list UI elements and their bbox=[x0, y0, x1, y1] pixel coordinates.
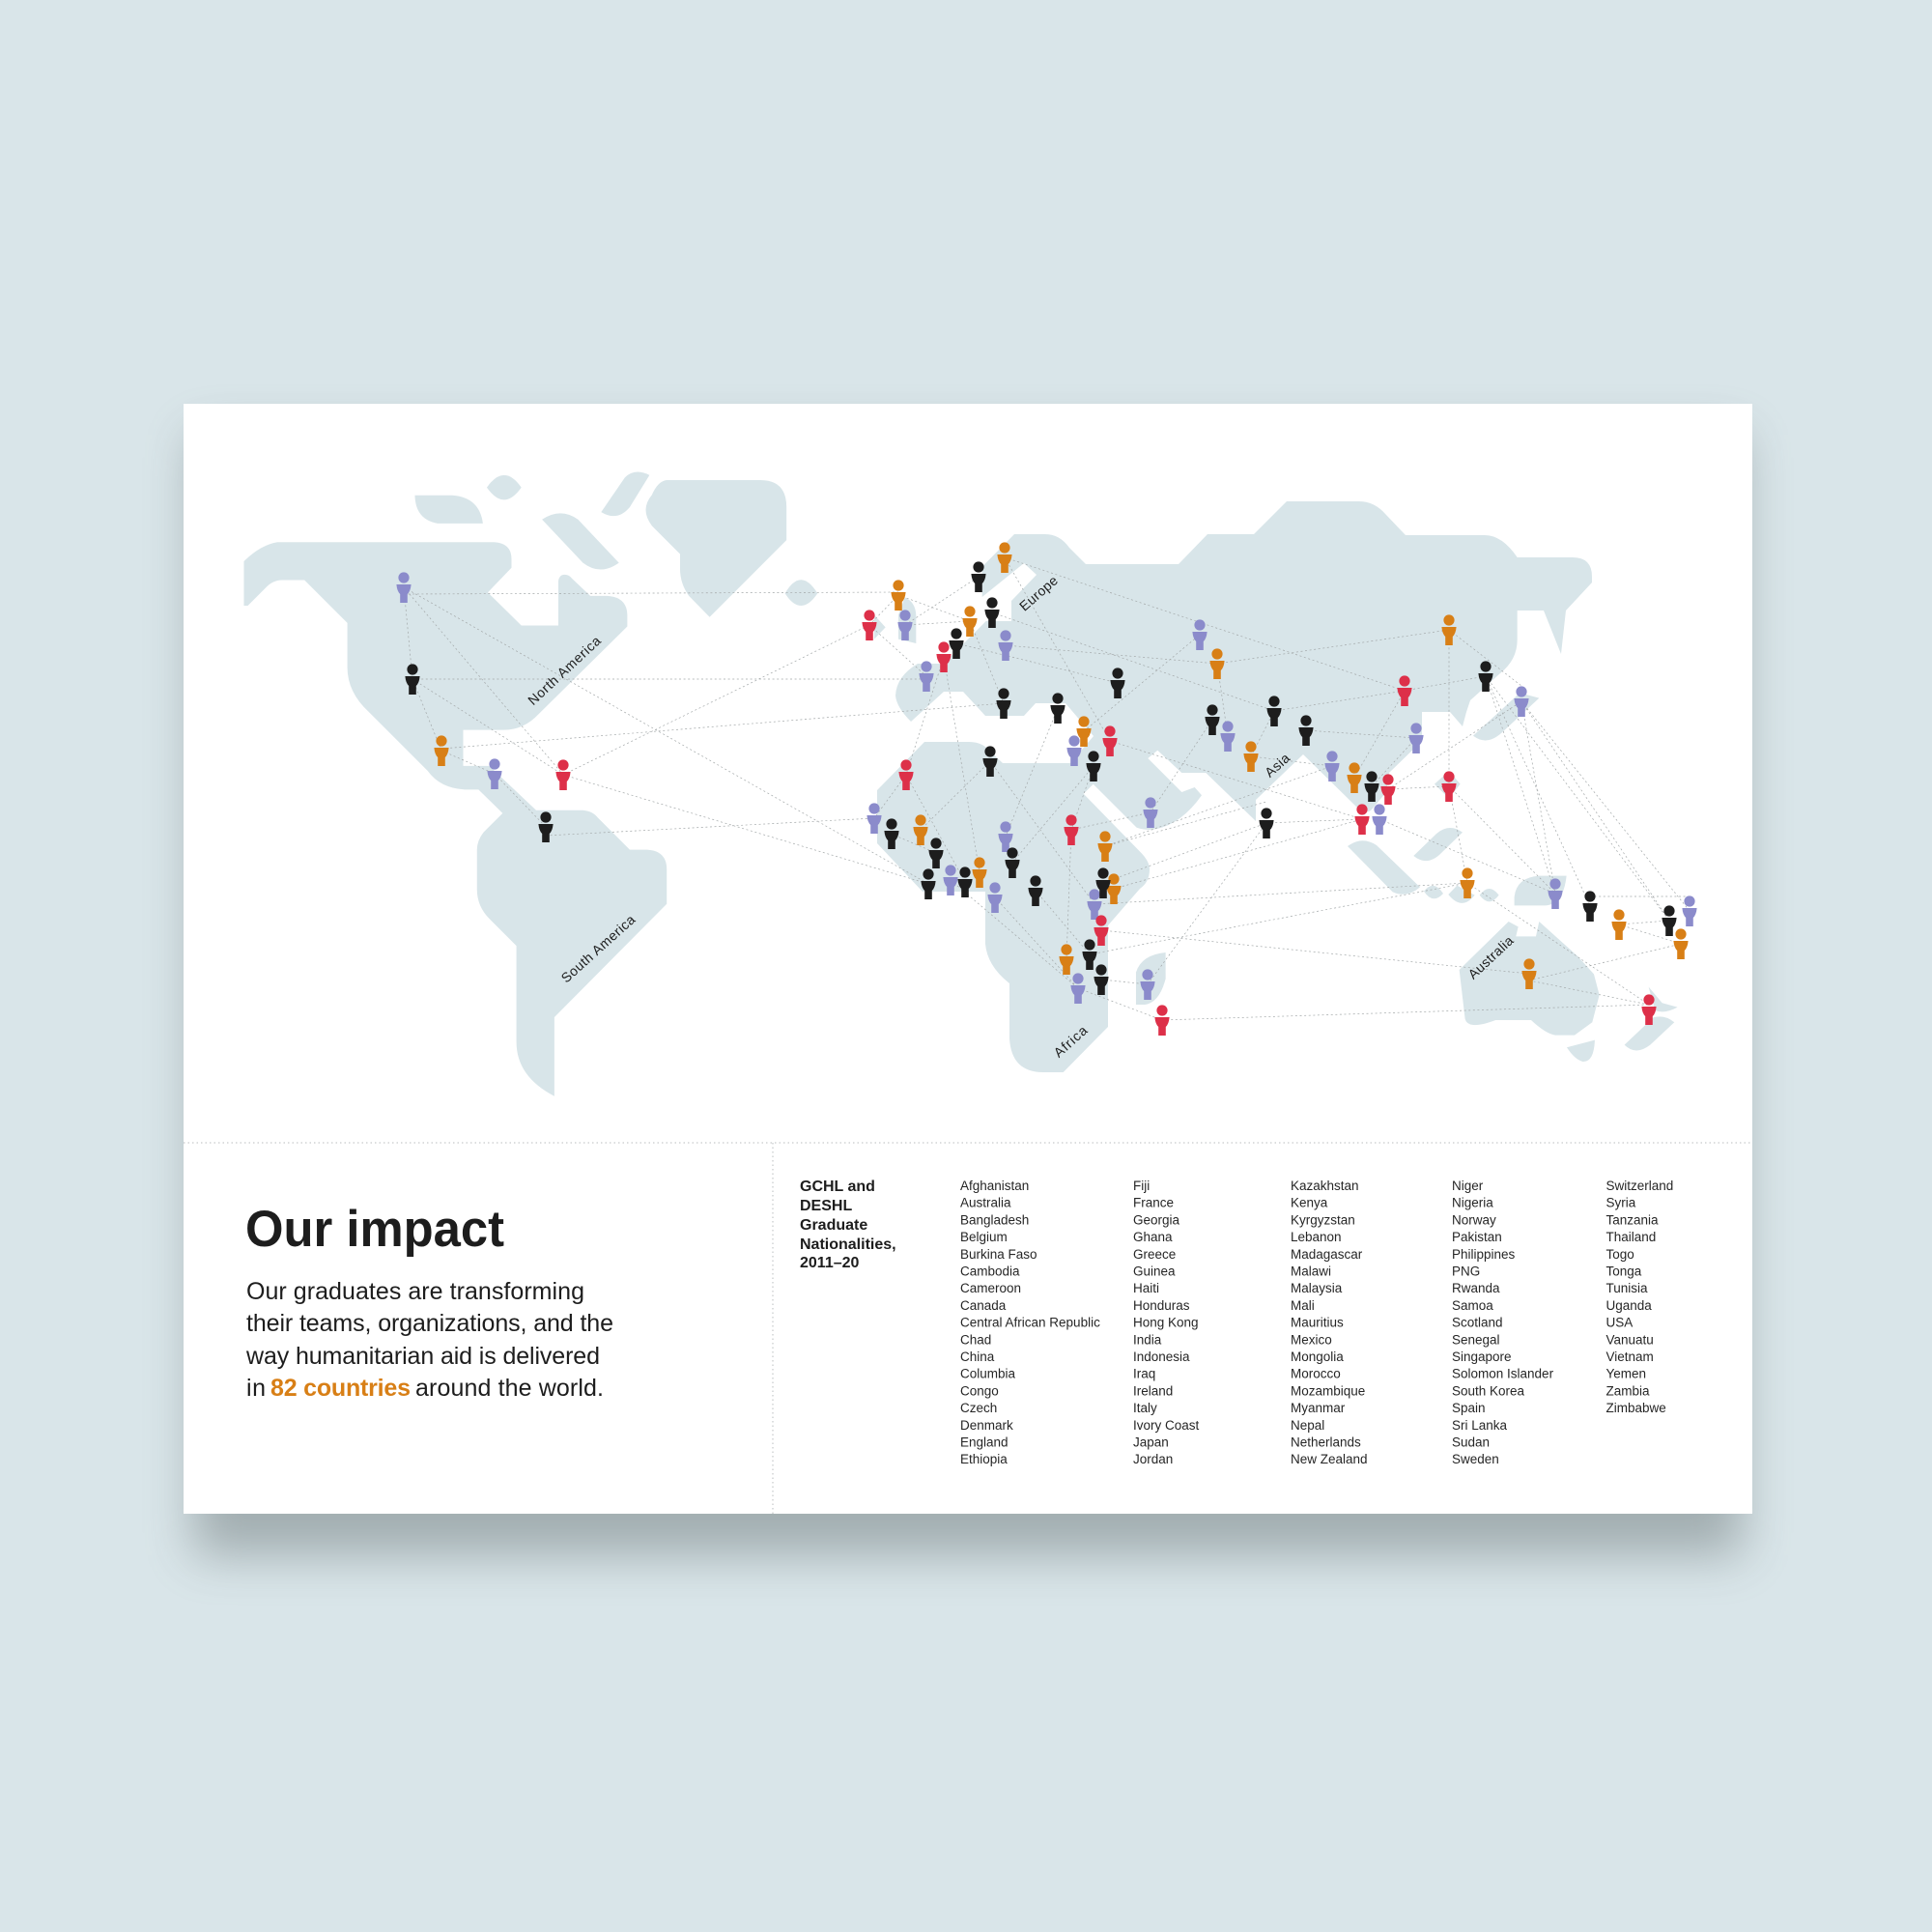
pin: purple bbox=[1087, 889, 1102, 920]
continent label: Asia: Asia bbox=[1262, 750, 1293, 781]
intro text block: Our graduates are transforming bbox=[246, 1278, 584, 1305]
pin: red bbox=[1397, 675, 1412, 706]
pin: black bbox=[1050, 693, 1065, 724]
pin: black bbox=[1082, 939, 1097, 970]
country list column 1: Burkina Faso bbox=[960, 1247, 1037, 1262]
country list column 2: Ghana bbox=[1133, 1230, 1173, 1244]
pin: black bbox=[1005, 847, 1020, 878]
country list column 2: Hong Kong bbox=[1133, 1316, 1199, 1330]
continent label: Australia: Australia bbox=[1464, 932, 1517, 982]
pin: purple bbox=[1324, 751, 1340, 781]
card shadow bbox=[193, 435, 1743, 1555]
country list column 3: Netherlands bbox=[1291, 1435, 1361, 1449]
list heading: GCHL and bbox=[800, 1179, 875, 1195]
country list column 5: Syria bbox=[1605, 1196, 1636, 1210]
country list column 5: Thailand bbox=[1605, 1230, 1656, 1244]
country list column 1: China bbox=[960, 1350, 995, 1364]
country list column 3: Malawi bbox=[1291, 1264, 1331, 1279]
pin: black bbox=[1205, 704, 1220, 735]
pin: purple bbox=[1192, 619, 1208, 650]
country list column 2: Ireland bbox=[1133, 1383, 1173, 1398]
country list column 4: Pakistan bbox=[1452, 1230, 1502, 1244]
pin: black bbox=[1095, 867, 1111, 898]
pin: orange bbox=[997, 542, 1012, 573]
country list column 1: Ethiopia bbox=[960, 1452, 1008, 1466]
country list column 4: Solomon Islander bbox=[1452, 1367, 1554, 1381]
list heading: Nationalities, bbox=[800, 1236, 896, 1253]
country list column 1: Afghanistan bbox=[960, 1179, 1029, 1193]
intro text block: in bbox=[246, 1375, 266, 1402]
country list column 5: Zimbabwe bbox=[1605, 1401, 1666, 1415]
country list column 4: Nigeria bbox=[1452, 1196, 1493, 1210]
country list column 5: Vietnam bbox=[1605, 1350, 1654, 1364]
country list column 3: New Zealand bbox=[1291, 1452, 1368, 1466]
pin: orange bbox=[434, 735, 449, 766]
pin: orange bbox=[1076, 716, 1092, 747]
country list column 5: Uganda bbox=[1605, 1298, 1652, 1313]
pin: orange bbox=[1059, 944, 1074, 975]
intro text block: way humanitarian aid is delivered bbox=[245, 1343, 600, 1370]
continent label: North America: North America bbox=[525, 633, 604, 708]
pin: black bbox=[1364, 771, 1379, 802]
country list column 2: France bbox=[1133, 1196, 1174, 1210]
pin: red bbox=[1094, 915, 1109, 946]
country list column 4: Philippines bbox=[1452, 1247, 1516, 1262]
pin: black bbox=[1298, 715, 1314, 746]
country list column 2: Ivory Coast bbox=[1133, 1418, 1200, 1433]
country list column 3: Kyrgyzstan bbox=[1291, 1212, 1355, 1227]
panel dividers bbox=[184, 1143, 1752, 1514]
world map bbox=[243, 472, 1697, 1096]
pin: purple bbox=[919, 661, 934, 692]
land: Americas and Arctic islands bbox=[243, 472, 817, 1096]
pin: purple bbox=[867, 803, 882, 834]
title: Our impact bbox=[245, 1201, 504, 1258]
intro text block: their teams, organizations, and the bbox=[246, 1310, 613, 1337]
country list column 3: Mongolia bbox=[1291, 1350, 1344, 1364]
country list column 3: Lebanon bbox=[1291, 1230, 1342, 1244]
country list column 3: Myanmar bbox=[1291, 1401, 1346, 1415]
country list column 4: Niger bbox=[1452, 1179, 1484, 1193]
list heading: Graduate bbox=[800, 1217, 867, 1234]
country list column 1: Australia bbox=[960, 1196, 1011, 1210]
pin: black bbox=[1478, 661, 1493, 692]
country list column 1: Bangladesh bbox=[960, 1212, 1029, 1227]
pin: red bbox=[898, 759, 914, 790]
country list column 2: Italy bbox=[1133, 1401, 1157, 1415]
pin: orange bbox=[913, 814, 928, 845]
pin: black bbox=[982, 746, 998, 777]
pin: black bbox=[928, 838, 944, 868]
pin: red bbox=[1441, 771, 1457, 802]
country list column 1: Columbia bbox=[960, 1367, 1016, 1381]
country list column 4: Samoa bbox=[1452, 1298, 1493, 1313]
country list column 4: Sudan bbox=[1452, 1435, 1490, 1449]
country list column 1: Chad bbox=[960, 1332, 991, 1347]
list heading: DESHL bbox=[800, 1198, 852, 1214]
country list column 3: Mauritius bbox=[1291, 1316, 1344, 1330]
country list column 4: Norway bbox=[1452, 1212, 1496, 1227]
pin: black bbox=[405, 664, 420, 695]
country list column 5: Togo bbox=[1605, 1247, 1634, 1262]
pin: black bbox=[971, 561, 986, 592]
pin: orange bbox=[1106, 873, 1122, 904]
pin: red bbox=[1354, 804, 1370, 835]
pin: purple bbox=[1514, 686, 1529, 717]
country list column 3: Mozambique bbox=[1291, 1383, 1365, 1398]
pin: purple bbox=[1548, 878, 1563, 909]
pin: orange bbox=[1521, 958, 1537, 989]
pin: black bbox=[1259, 808, 1274, 838]
pin: black bbox=[1094, 964, 1109, 995]
country list column 3: Malaysia bbox=[1291, 1281, 1343, 1295]
list heading: 2011–20 bbox=[800, 1255, 860, 1271]
pin: black bbox=[1028, 875, 1043, 906]
country list column 4: PNG bbox=[1452, 1264, 1480, 1279]
country list column 2: Jordan bbox=[1133, 1452, 1173, 1466]
panel: white card bbox=[184, 404, 1752, 1514]
pin: orange bbox=[1347, 762, 1362, 793]
pin: red bbox=[1102, 725, 1118, 756]
pin: black bbox=[957, 867, 973, 897]
country list column 1: Canada bbox=[960, 1298, 1007, 1313]
pin: purple bbox=[1408, 723, 1424, 753]
intro text block bbox=[245, 1278, 613, 1402]
country list column 4: Rwanda bbox=[1452, 1281, 1500, 1295]
country list column 5: Tunisia bbox=[1605, 1281, 1648, 1295]
pin: red bbox=[862, 610, 877, 640]
country list column 1: Cameroon bbox=[960, 1281, 1021, 1295]
country list column 3: Mali bbox=[1291, 1298, 1315, 1313]
pin: purple bbox=[396, 572, 412, 603]
pin: purple bbox=[1143, 797, 1158, 828]
country list column 3: Morocco bbox=[1291, 1367, 1341, 1381]
continent label: Africa: Africa bbox=[1050, 1022, 1091, 1061]
pin: orange bbox=[1209, 648, 1225, 679]
pin: purple bbox=[1372, 804, 1387, 835]
pin: purple bbox=[897, 610, 913, 640]
pin: black bbox=[949, 628, 964, 659]
pin: black bbox=[1110, 668, 1125, 698]
country list column 1: England bbox=[960, 1435, 1009, 1449]
pin: red bbox=[936, 641, 952, 672]
continent label: Europe: Europe bbox=[1016, 572, 1061, 613]
pin: purple bbox=[487, 758, 502, 789]
country list column 2: Guinea bbox=[1133, 1264, 1176, 1279]
country list column 3: Kenya bbox=[1291, 1196, 1328, 1210]
intro text block: around the world. bbox=[415, 1375, 604, 1402]
pin: orange bbox=[1673, 928, 1689, 959]
pin: red bbox=[1064, 814, 1079, 845]
country list column 3: Madagascar bbox=[1291, 1247, 1363, 1262]
country list column 5: Tanzania bbox=[1605, 1212, 1659, 1227]
country list column 5: Yemen bbox=[1605, 1367, 1646, 1381]
country list column 4: Sweden bbox=[1452, 1452, 1499, 1466]
intro text block: 82 countries bbox=[270, 1375, 411, 1402]
pin: black bbox=[996, 688, 1011, 719]
country list column 3: Kazakhstan bbox=[1291, 1179, 1359, 1193]
land: Southeast Asia and Oceania bbox=[1348, 828, 1678, 1062]
country list column 2: Indonesia bbox=[1133, 1350, 1190, 1364]
country list column 5: Zambia bbox=[1605, 1383, 1650, 1398]
pin: black bbox=[984, 597, 1000, 628]
pin: red bbox=[1380, 774, 1396, 805]
country list column 2: Haiti bbox=[1133, 1281, 1159, 1295]
pin: purple bbox=[943, 865, 958, 895]
pin: orange bbox=[1097, 831, 1113, 862]
pin: black bbox=[921, 868, 936, 899]
pin: red bbox=[555, 759, 571, 790]
pin: orange bbox=[1441, 614, 1457, 645]
country list column 4: Singapore bbox=[1452, 1350, 1512, 1364]
country list column 1: Belgium bbox=[960, 1230, 1008, 1244]
country list column 4: Scotland bbox=[1452, 1316, 1503, 1330]
pin: purple bbox=[1682, 895, 1697, 926]
pin: orange bbox=[891, 580, 906, 611]
land: Afro-Eurasia bbox=[877, 501, 1592, 1072]
pin: purple bbox=[1066, 735, 1082, 766]
country list column 2: Iraq bbox=[1133, 1367, 1155, 1381]
country list column 3: Nepal bbox=[1291, 1418, 1324, 1433]
country list column 4: Spain bbox=[1452, 1401, 1486, 1415]
country list column 1: Central African Republic bbox=[960, 1316, 1100, 1330]
land: UK and Ireland bbox=[874, 597, 916, 643]
country list column 2: Japan bbox=[1133, 1435, 1169, 1449]
land: Madagascar bbox=[1136, 952, 1166, 1005]
pin: purple bbox=[1140, 969, 1155, 1000]
pin: orange bbox=[1243, 741, 1259, 772]
country list column 2: Honduras bbox=[1133, 1298, 1190, 1313]
pin: black bbox=[1266, 696, 1282, 726]
pin: purple bbox=[1070, 973, 1086, 1004]
connection endpoints: graduate pins bbox=[396, 542, 1697, 1036]
country list column 5: Vanuatu bbox=[1605, 1332, 1654, 1347]
country list column 5: Tonga bbox=[1605, 1264, 1642, 1279]
pin: black bbox=[1662, 905, 1677, 936]
dotted connection network bbox=[404, 557, 1690, 1020]
pin: orange bbox=[1460, 867, 1475, 898]
pin: orange bbox=[962, 606, 978, 637]
pin: red bbox=[1154, 1005, 1170, 1036]
country list column 4: South Korea bbox=[1452, 1383, 1525, 1398]
country list column 2: Georgia bbox=[1133, 1212, 1180, 1227]
pin: purple bbox=[998, 630, 1013, 661]
country list column 2: Fiji bbox=[1133, 1179, 1150, 1193]
country list column 1: Cambodia bbox=[960, 1264, 1020, 1279]
country list column 1: Denmark bbox=[960, 1418, 1013, 1433]
country list column 3: Mexico bbox=[1291, 1332, 1332, 1347]
country list column 4: Sri Lanka bbox=[1452, 1418, 1508, 1433]
pin: black bbox=[1582, 891, 1598, 922]
pin: black bbox=[884, 818, 899, 849]
country list column 5: Switzerland bbox=[1605, 1179, 1673, 1193]
pin: black bbox=[1086, 751, 1101, 781]
country list column 5: USA bbox=[1605, 1316, 1633, 1330]
pin: orange bbox=[1611, 909, 1627, 940]
land: Japan and Taiwan bbox=[1435, 693, 1539, 799]
country list column 1: Congo bbox=[960, 1383, 999, 1398]
pin: orange bbox=[972, 857, 987, 888]
country list column 2: India bbox=[1133, 1332, 1162, 1347]
country list column 4: Senegal bbox=[1452, 1332, 1500, 1347]
pin: purple bbox=[1220, 721, 1236, 752]
country list column 2: Greece bbox=[1133, 1247, 1176, 1262]
pin: purple bbox=[998, 821, 1013, 852]
country list column 1: Czech bbox=[960, 1401, 997, 1415]
pin: black bbox=[538, 811, 554, 842]
continent label: South America: South America bbox=[558, 911, 639, 985]
pin: red bbox=[1641, 994, 1657, 1025]
pin: purple bbox=[987, 882, 1003, 913]
